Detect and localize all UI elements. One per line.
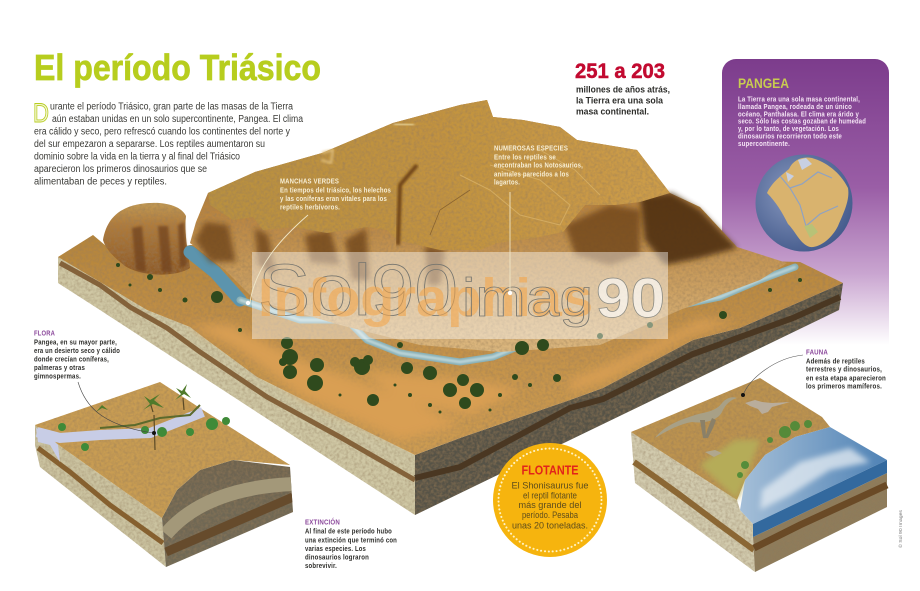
callout: Numerosas especies: encontraban los Notosaurios,: [494, 162, 583, 170]
intro text block: aparecieron los primeros dinosaurios que se: [34, 164, 207, 175]
callout: Manchas verdes: reptiles herbívoros.: [280, 204, 340, 212]
plateau shading and cracks: [321, 124, 600, 245]
caption: Extinción: sobrevivir.: [305, 563, 337, 570]
caption: Fauna: [806, 350, 886, 390]
caption: Fauna: terrestres y dinosaurios,: [806, 366, 882, 374]
ground highlights: [190, 320, 735, 440]
callout: Manchas verdes: En tiempos del triásico, los helechos: [280, 188, 391, 194]
date callout: [575, 60, 670, 118]
flora leader: [78, 382, 156, 435]
callout: Numerosas especies: [494, 146, 583, 295]
small butte: [103, 203, 190, 275]
fauna shore tint: [700, 440, 760, 500]
caption: Extinción: dinosaurios lograron: [305, 554, 369, 562]
callout: Numerosas especies: animales parecidos a los: [494, 172, 569, 178]
flora left face: [35, 425, 166, 567]
caption: Fauna: Además de reptiles: [806, 358, 865, 366]
flora front face: [162, 460, 293, 567]
Pangea text: y, por lo tanto, de vegetación. Los: [738, 126, 839, 133]
caption: Flora: gimnospermas.: [34, 374, 81, 380]
caption: Extinción: Al final de este período hubo: [305, 528, 392, 536]
trees: [116, 263, 802, 414]
callout: Manchas verdes: y las coníferas eran vitales para los: [280, 196, 387, 203]
intro text block: del sur empezaron a separarse. Los reptiles aumentaron su: [34, 139, 265, 150]
caption: Extinción: [305, 518, 397, 570]
dinosaurs: [655, 397, 790, 457]
callout: Numerosas especies: NUMEROSAS ESPECIES: [494, 146, 568, 152]
intro text block: alimentaban de peces y reptiles.: [34, 176, 167, 188]
watermark: Sol90: [258, 251, 458, 331]
callout: Flotante: el reptil flotante: [523, 490, 577, 500]
illustration: main terrain block: [58, 100, 843, 515]
Pangea text: [738, 96, 866, 148]
fauna front face: [753, 473, 887, 572]
callout: Manchas verdes: MANCHAS VERDES: [280, 178, 339, 186]
callout: Numerosas especies: lagartos.: [494, 180, 520, 186]
water: [740, 427, 887, 537]
fauna top surface: [631, 378, 830, 500]
Pangea text: dinosaurios recorrieron todo este: [738, 134, 842, 140]
intro text block: urante el período Triásico, gran parte de las masas de la Tierra: [50, 102, 293, 112]
caption: Flora: FLORA: [34, 330, 55, 338]
callout: Flotante: más grande del: [518, 500, 582, 510]
shore vegetation: [737, 420, 812, 478]
caption: Extinción: EXTINCIÓN: [305, 518, 340, 526]
intro text block: era cálido y seco, pero refrescó cuando los continentes del norte y: [34, 126, 290, 138]
intro text block: dominio sobre la vida en la tierra y al final del Triásico: [34, 152, 240, 162]
globe: [756, 154, 852, 252]
watermark: imag: [462, 268, 593, 328]
Pangea text: La Tierra era una sola masa continental,: [738, 96, 860, 104]
callout: Flotante: [493, 443, 607, 557]
flora top surface: [35, 382, 290, 518]
Pangea text: seco. Sólo las costas gozaban de humedad: [738, 118, 866, 126]
flora river: [37, 412, 203, 438]
caption: Extinción: varias especies. Los: [305, 546, 366, 553]
Pangea text: océano, Panthalasa. El clima era árido y: [738, 112, 859, 118]
panel: Pangea: [722, 59, 889, 345]
watermark: Infographias: [258, 268, 593, 328]
caption: Flora: era un desierto seco y cálido: [34, 348, 120, 355]
fauna leader: [741, 355, 803, 397]
cliffs: [190, 100, 787, 352]
caption: Extinción: una extinción que terminó con: [305, 538, 397, 544]
date callout: 251 a 203: [575, 60, 665, 83]
caption: Flora: [34, 330, 120, 380]
caption: Flora: Pangea, en su mayor parte,: [34, 340, 117, 346]
caption: Fauna: FAUNA: [806, 350, 828, 356]
illustration: fauna block: [631, 355, 887, 572]
caption: Fauna: los primeros mamíferos.: [806, 384, 882, 390]
mountain: [190, 100, 787, 352]
callout: Numerosas especies: Entre los reptiles se: [494, 154, 556, 162]
copyright: © Sol 90 Images: [897, 509, 903, 548]
top ground surface: [58, 235, 843, 455]
caption: Flora: donde crecían coníferas,: [34, 356, 109, 364]
left strata face: [58, 257, 415, 515]
intro text block: aún estaban unidas en un solo supercontinente, Pangea. El clima: [52, 114, 303, 125]
dark upper right slope: [640, 193, 737, 265]
callout: Manchas verdes: [246, 178, 391, 305]
callout: Flotante: período. Pesaba: [522, 510, 578, 520]
illustration: flora block: [35, 382, 293, 567]
flora vegetation: [58, 384, 230, 451]
drop cap: D: [33, 98, 49, 128]
plateau top: [208, 100, 670, 250]
Pangea text: supercontinente.: [738, 141, 790, 148]
dark cliff shadows: [195, 205, 640, 285]
right strata face: [415, 283, 843, 515]
watermark: 90: [596, 266, 665, 329]
fauna left face: [631, 432, 755, 572]
river: [190, 252, 795, 362]
caption: Fauna: en esta etapa aparecieron: [806, 376, 886, 382]
date callout: masa continental.: [576, 106, 649, 118]
title: El período Triásico: [34, 47, 321, 88]
callout: Flotante: El Shonisaurus fue: [512, 480, 588, 490]
watermark: [252, 251, 668, 339]
date callout: millones de años atrás,: [576, 84, 670, 96]
callout: Flotante: unas 20 toneladas.: [512, 520, 588, 530]
date callout: la Tierra era una sola: [576, 96, 664, 106]
caption: Flora: palmeras y otras: [34, 365, 85, 372]
Pangea text: llamada Pangea, rodeada de un único: [738, 104, 852, 111]
intro text block: [33, 98, 303, 188]
Pangea heading: PANGEA: [738, 76, 789, 91]
callout: Flotante: FLOTANTE: [522, 462, 579, 478]
